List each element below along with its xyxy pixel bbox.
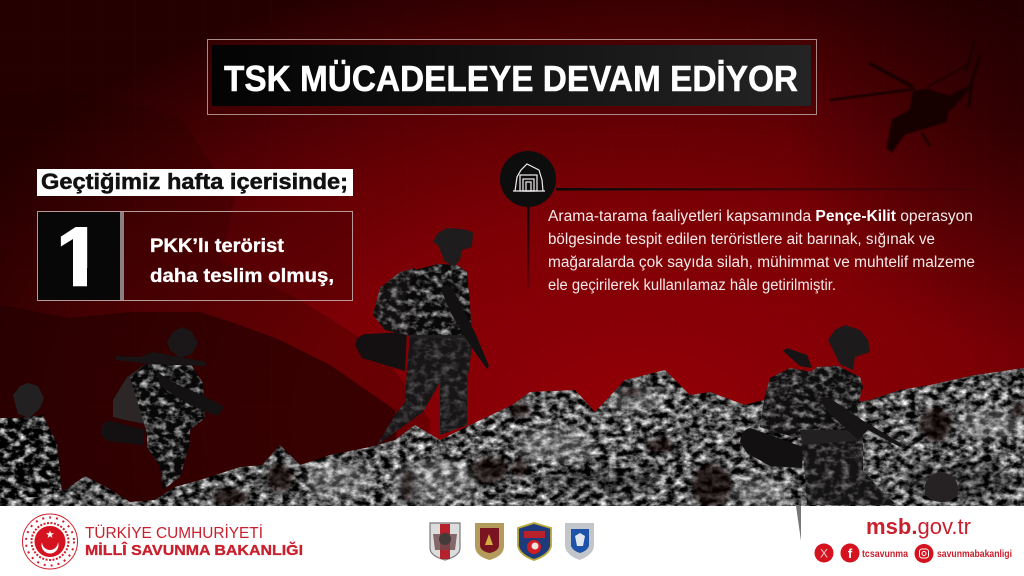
stat panel: 1 PKK'lı terörist: daha teslim olmuş, bbox=[150, 266, 334, 287]
icon: instagram bbox=[914, 544, 934, 563]
ministry name bbox=[85, 524, 303, 559]
stat panel: 1 PKK'lı terörist: PKK’lı terörist bbox=[150, 236, 285, 257]
stat panel: 1 PKK'lı terörist bbox=[38, 210, 352, 305]
soldier: right bbox=[740, 325, 902, 505]
icon: X social bbox=[814, 544, 834, 562]
operation description text: ele geçirilerek kullanılamaz hâle getirilmiştir. bbox=[548, 277, 836, 294]
small helmet on the ground bbox=[925, 472, 958, 502]
handle: tcsavunma: tcsavunma bbox=[862, 549, 908, 560]
emblem: gendarmerie shield bbox=[518, 523, 551, 560]
emblem: land forces bbox=[430, 523, 460, 560]
subheading: Geçtiğimiz hafta içerisinde: Geçtiğimiz hafta içerisinde; bbox=[41, 169, 348, 194]
operation description text: Arama-tarama faaliyetleri kapsamında Pençe-Kilit operasyon bbox=[548, 208, 973, 225]
logo: ministry emblem bbox=[22, 514, 78, 569]
handle: savunmabakanligi: savunmabakanligi bbox=[937, 549, 1012, 560]
icon: facebook bbox=[840, 544, 860, 562]
operation description text: bölgesinde tespit edilen teröristlere ait barınak, sığınak ve bbox=[548, 231, 935, 248]
emblem: coast guard silver shield bbox=[565, 523, 594, 560]
title block bbox=[208, 40, 816, 114]
operation description text bbox=[548, 208, 975, 294]
ministry name: MİLLÎ SAVUNMA BAKANLIĞI bbox=[85, 541, 303, 559]
title block: TSK MÜCADELEYE DEVAM EDİYOR bbox=[224, 58, 798, 99]
website address: msb.gov.tr bbox=[866, 514, 971, 539]
soldier: left bbox=[102, 327, 224, 490]
icon: X social: X bbox=[820, 546, 828, 560]
emblem: naval / gold shield bbox=[475, 523, 504, 560]
soldier: center bbox=[355, 228, 489, 445]
soldier: far left bbox=[0, 383, 62, 506]
rocky mountain foreground bbox=[0, 368, 1024, 520]
icon: facebook: f bbox=[848, 546, 853, 561]
white footer bbox=[0, 503, 1024, 576]
stat panel: 1 PKK'lı terörist: 1 bbox=[55, 210, 103, 305]
helicopter silhouette bbox=[830, 40, 980, 152]
icon: shelter cave in black circle bbox=[500, 151, 978, 288]
ministry name: TÜRKİYE CUMHURİYETİ bbox=[85, 524, 263, 542]
operation description text: mağaralarda çok sayıda silah, mühimmat ve muhtelif malzeme bbox=[548, 254, 975, 271]
